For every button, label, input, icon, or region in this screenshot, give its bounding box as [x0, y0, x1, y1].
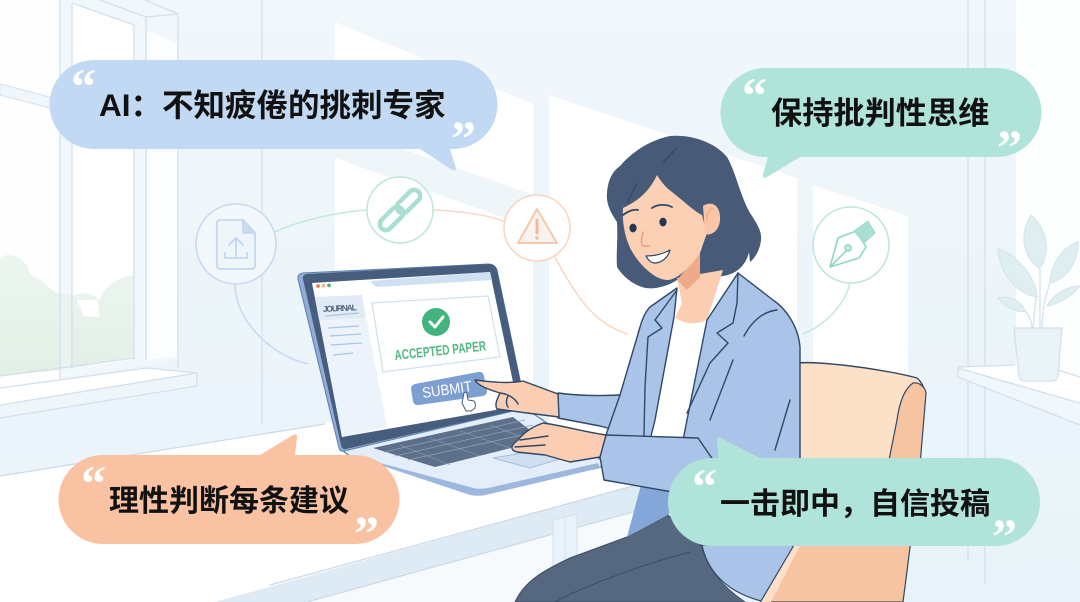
- icon: chain link: [367, 177, 433, 243]
- jacket lower left: [627, 480, 690, 537]
- opening quote: “: [742, 67, 767, 123]
- pants: [515, 515, 745, 602]
- mouth: [646, 250, 670, 263]
- callout text: 一击即中，自信投稿: [720, 488, 990, 521]
- jacket hem: [702, 545, 794, 601]
- jacket right panel: [682, 273, 800, 546]
- opening quote: “: [81, 455, 106, 511]
- hand: on trackpad: [512, 423, 606, 462]
- hand: pointing: [475, 380, 559, 417]
- laptop: SUBMIT: [421, 378, 473, 402]
- chair: [761, 363, 926, 602]
- trackpad: [493, 449, 563, 468]
- neck: [675, 270, 723, 324]
- person: [475, 136, 800, 602]
- sidebar label: JOURNAL: [323, 302, 357, 314]
- sleeve: lower arm: [600, 435, 720, 495]
- closing quote: ”: [451, 110, 476, 166]
- callout text: AI：不知疲倦的挑刺专家: [99, 87, 446, 123]
- desk: [0, 421, 640, 602]
- hair: [607, 136, 761, 288]
- window: left: [0, 0, 197, 418]
- closing quote: ”: [354, 505, 379, 561]
- laptop base: [342, 408, 604, 491]
- opening quote: “: [71, 58, 96, 114]
- shelf: right: [958, 365, 1080, 583]
- shirt: [650, 317, 707, 440]
- closing quote: ”: [997, 119, 1022, 175]
- icon: pen nib: [813, 207, 889, 283]
- callout: AI tireless critic: [50, 58, 497, 171]
- callout: confident submission: [668, 437, 1040, 564]
- potted plant: [998, 215, 1080, 381]
- screen: [312, 272, 518, 437]
- keyboard: [373, 417, 543, 467]
- accepted text: ACCEPTED PAPER: [394, 337, 487, 363]
- lid and bezel: [298, 264, 526, 451]
- hair strands: [627, 148, 677, 203]
- face: [623, 175, 707, 280]
- light beams on wall: [262, 0, 1080, 450]
- connector lines: [235, 210, 850, 364]
- icon: warning triangle: [504, 195, 570, 261]
- sleeve: pointing arm: [558, 393, 650, 438]
- nose: [642, 232, 650, 246]
- accepted card: [372, 296, 500, 372]
- brows and eyes: [623, 205, 672, 215]
- ear: [703, 204, 720, 234]
- closing quote: ”: [992, 508, 1017, 564]
- cursor: [462, 392, 475, 411]
- icon: document upload: [196, 204, 276, 284]
- jacket left panel: [606, 288, 677, 440]
- callout: judge each suggestion: [58, 434, 399, 561]
- submit button: [411, 372, 487, 405]
- callout text: 理性判断每条建议: [109, 485, 349, 518]
- callout text: 保持批判性思维: [771, 96, 989, 131]
- opening quote: “: [692, 458, 717, 514]
- laptop: [298, 264, 604, 496]
- callout: keep critical thinking: [720, 67, 1042, 178]
